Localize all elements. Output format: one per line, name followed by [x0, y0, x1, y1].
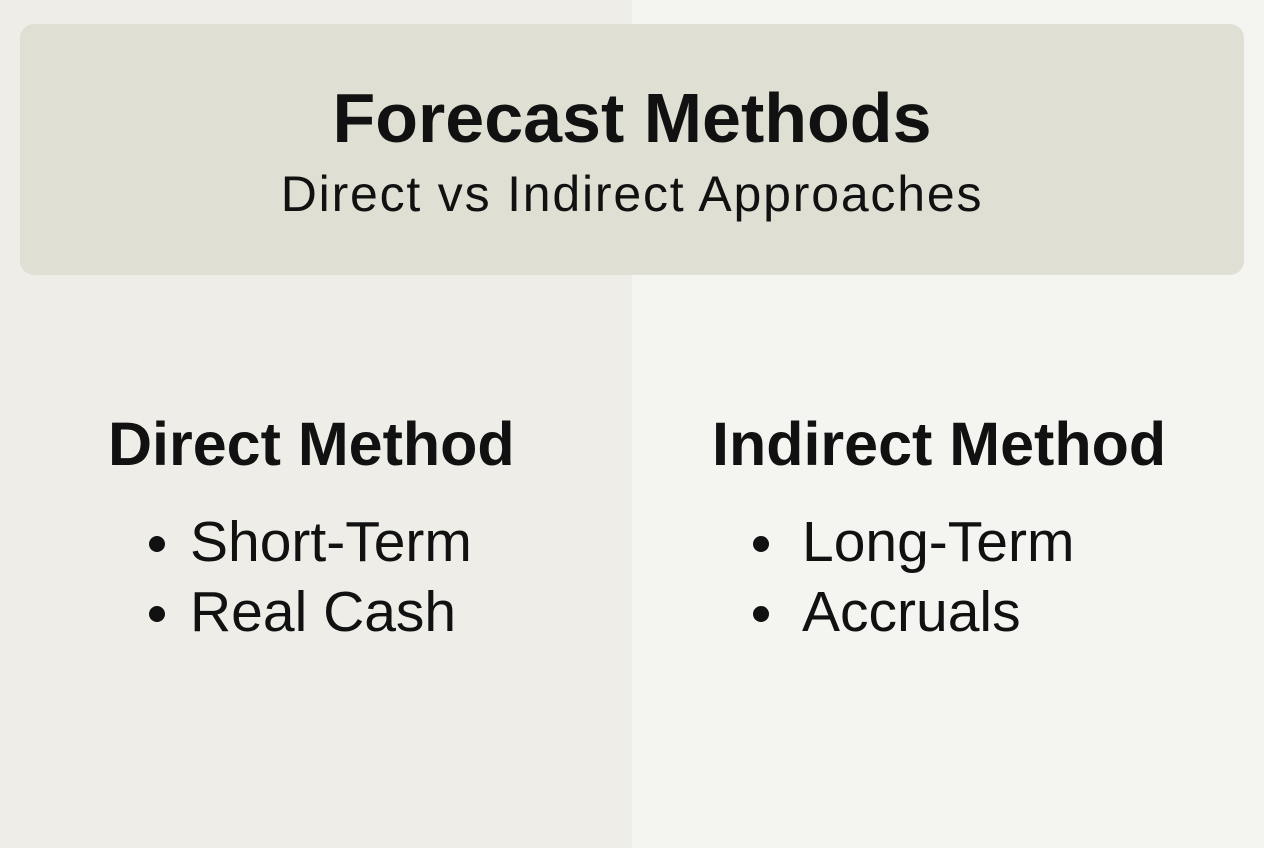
bullet list: direct	[149, 510, 472, 644]
bullet list: indirect: Accruals	[802, 580, 1021, 644]
header panel	[20, 24, 1244, 275]
bullet list: direct: Real Cash	[190, 580, 456, 644]
heading: direct: Direct Method	[108, 410, 515, 478]
panel: indirect method	[712, 410, 1166, 644]
panel: direct method	[108, 410, 515, 644]
bullet list: direct: Short-Term	[190, 510, 472, 574]
bullet list: indirect	[753, 510, 1074, 644]
title: Forecast Methods	[332, 79, 932, 157]
subtitle: Direct vs Indirect Approaches	[281, 166, 983, 222]
bullet list: indirect: Long-Term	[802, 510, 1074, 574]
heading: indirect: Indirect Method	[712, 410, 1166, 478]
